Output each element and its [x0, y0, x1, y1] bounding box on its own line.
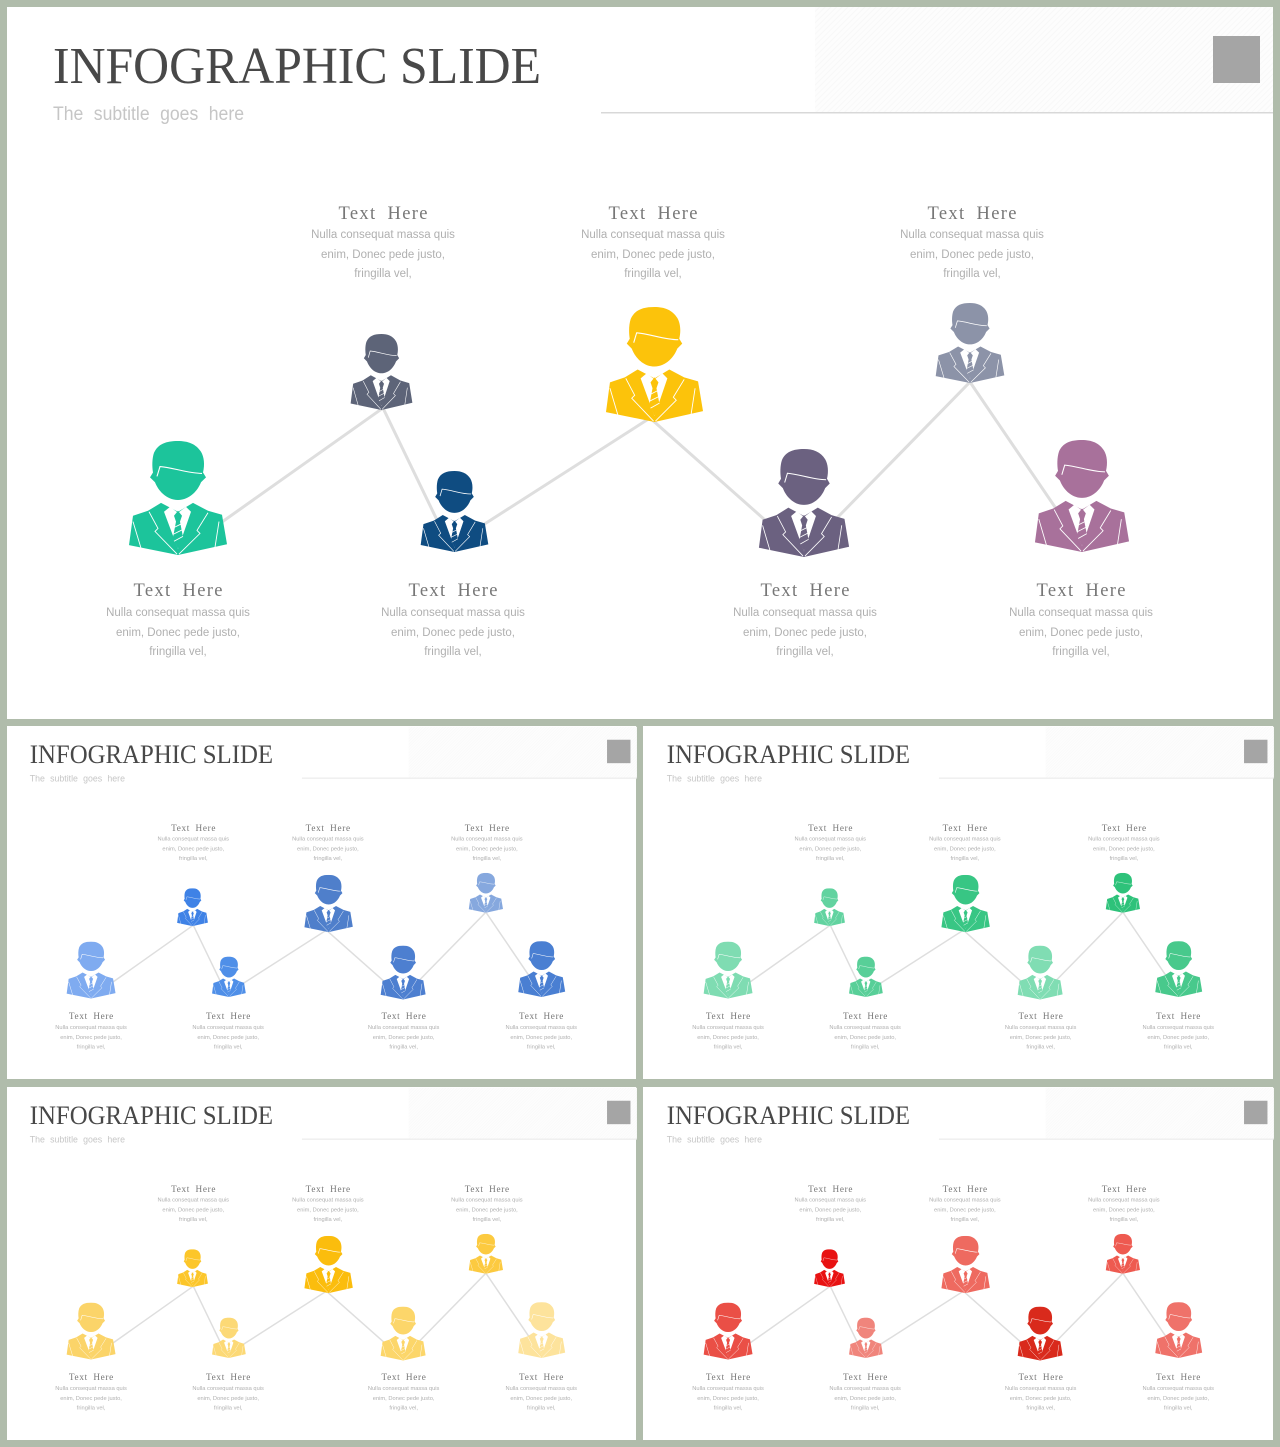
callout 3: [381, 581, 525, 658]
callouts: Text Here: [706, 1011, 750, 1021]
callout 3: Nulla consequat massa quis: [381, 607, 525, 619]
callouts: fringilla vel,: [1164, 1405, 1193, 1411]
callout 1: [106, 581, 250, 658]
callouts: Nulla consequat massa quis: [292, 1197, 364, 1203]
callouts: Nulla consequat massa quis: [795, 836, 866, 842]
callouts: enim, Donec pede justo,: [799, 1207, 862, 1213]
title: INFOGRAPHIC SLIDE: [667, 1101, 910, 1130]
callouts: fringilla vel,: [77, 1405, 106, 1411]
callout 1: Nulla consequat massa quis: [106, 607, 250, 619]
callouts: Text Here: [843, 1011, 887, 1021]
callouts: enim, Donec pede justo,: [162, 846, 225, 852]
callouts: [55, 823, 577, 1050]
callouts: fringilla vel,: [389, 1405, 418, 1411]
person: green: [129, 441, 227, 555]
callout 7: Text Here: [1036, 581, 1126, 601]
callouts: Text Here: [306, 1184, 350, 1194]
callouts: Nulla consequat massa quis: [55, 1025, 127, 1031]
callouts: Text Here: [306, 823, 350, 833]
callout 4: enim, Donec pede justo,: [591, 249, 715, 261]
callouts: fringilla vel,: [1026, 1405, 1055, 1411]
callouts: fringilla vel,: [816, 1217, 845, 1223]
callouts: enim, Donec pede justo,: [510, 1035, 572, 1041]
callouts: enim, Donec pede justo,: [297, 846, 359, 852]
callout 3: Text Here: [408, 581, 498, 601]
subtitle: The subtitle goes here: [667, 774, 762, 785]
connector lines: [750, 1273, 1166, 1345]
callout 5: enim, Donec pede justo,: [743, 627, 867, 639]
callouts: Nulla consequat massa quis: [55, 1386, 127, 1392]
callout 7: [1009, 581, 1153, 658]
callouts: Nulla consequat massa quis: [158, 1197, 229, 1203]
callout 4: fringilla vel,: [624, 268, 682, 280]
callouts: enim, Donec pede justo,: [456, 1207, 518, 1213]
callout 3: enim, Donec pede justo,: [391, 627, 515, 639]
callout 4: [581, 204, 725, 280]
callouts: enim, Donec pede justo,: [934, 1207, 996, 1213]
panel: green variant: [643, 726, 1274, 1079]
callouts: [692, 1184, 1214, 1411]
callouts: enim, Donec pede justo,: [297, 1207, 359, 1213]
callouts: fringilla vel,: [951, 1217, 980, 1223]
callout 6: [900, 204, 1044, 280]
panel: yellow variant: [7, 1087, 637, 1440]
callouts: enim, Donec pede justo,: [373, 1035, 435, 1041]
callout 6: Text Here: [928, 204, 1016, 224]
callouts: Nulla consequat massa quis: [692, 1025, 764, 1031]
subtitle: The subtitle goes here: [30, 1135, 125, 1146]
callouts: enim, Donec pede justo,: [197, 1035, 259, 1041]
callouts: Text Here: [465, 823, 509, 833]
callouts: fringilla vel,: [214, 1405, 243, 1411]
person: mauve: [1035, 440, 1129, 552]
callouts: Text Here: [843, 1372, 887, 1382]
callouts: fringilla vel,: [473, 1217, 502, 1223]
callouts: fringilla vel,: [1026, 1044, 1055, 1050]
corner square: [1213, 36, 1260, 83]
header rule: [601, 112, 1273, 114]
callouts: Text Here: [519, 1011, 563, 1021]
subtitle: The subtitle goes here: [30, 774, 125, 785]
callouts: enim, Donec pede justo,: [834, 1035, 896, 1041]
callouts: enim, Donec pede justo,: [60, 1396, 122, 1402]
connector lines: [113, 1273, 529, 1345]
callout 5: Nulla consequat massa quis: [733, 607, 877, 619]
callout 4: Text Here: [608, 204, 698, 224]
callouts: enim, Donec pede justo,: [1093, 846, 1155, 852]
panel: main slide: [7, 7, 1273, 719]
callout 7: fringilla vel,: [1052, 646, 1110, 658]
callouts: Nulla consequat massa quis: [929, 1197, 1001, 1203]
callouts: Text Here: [69, 1011, 113, 1021]
callouts: Text Here: [1102, 823, 1146, 833]
callouts: Text Here: [1018, 1011, 1063, 1021]
callouts: Nulla consequat massa quis: [192, 1386, 264, 1392]
callouts: Text Here: [171, 1184, 215, 1194]
callouts: enim, Donec pede justo,: [197, 1396, 259, 1402]
callouts: Nulla consequat massa quis: [929, 836, 1001, 842]
connector lines: [113, 912, 529, 984]
callouts: enim, Donec pede justo,: [1093, 1207, 1155, 1213]
callouts: fringilla vel,: [816, 856, 845, 862]
subtitle: The subtitle goes here: [667, 1135, 762, 1146]
callout 1: Text Here: [134, 581, 222, 601]
callouts: Text Here: [206, 1011, 250, 1021]
callouts: enim, Donec pede justo,: [697, 1035, 759, 1041]
callouts: fringilla vel,: [1110, 1217, 1139, 1223]
callout 6: fringilla vel,: [943, 268, 1001, 280]
callouts: enim, Donec pede justo,: [1010, 1396, 1072, 1402]
callouts: fringilla vel,: [77, 1044, 106, 1050]
title: INFOGRAPHIC SLIDE: [667, 740, 910, 769]
callouts: Nulla consequat massa quis: [1005, 1025, 1077, 1031]
callouts: enim, Donec pede justo,: [162, 1207, 225, 1213]
callout 1: enim, Donec pede justo,: [116, 627, 240, 639]
callouts: fringilla vel,: [314, 856, 343, 862]
callout 2: Text Here: [338, 204, 428, 224]
callouts: fringilla vel,: [473, 856, 502, 862]
callouts: enim, Donec pede justo,: [934, 846, 996, 852]
callouts: Text Here: [808, 1184, 852, 1194]
callouts: [55, 1184, 577, 1411]
title: INFOGRAPHIC SLIDE: [30, 1101, 273, 1130]
callout 6: enim, Donec pede justo,: [910, 249, 1034, 261]
callouts: Nulla consequat massa quis: [795, 1197, 866, 1203]
callouts: Text Here: [1018, 1372, 1063, 1382]
callouts: enim, Donec pede justo,: [1010, 1035, 1072, 1041]
header pattern: [815, 7, 1273, 112]
callouts: Nulla consequat massa quis: [505, 1025, 577, 1031]
callouts: fringilla vel,: [527, 1044, 556, 1050]
people: [67, 873, 565, 999]
callout 2: [311, 204, 455, 280]
callouts: Nulla consequat massa quis: [368, 1025, 440, 1031]
callouts: Nulla consequat massa quis: [1088, 1197, 1160, 1203]
callouts: fringilla vel,: [951, 856, 980, 862]
callout 2: enim, Donec pede justo,: [321, 249, 445, 261]
callouts: Text Here: [706, 1372, 750, 1382]
callouts: Text Here: [1156, 1372, 1200, 1382]
callouts: Text Here: [1156, 1011, 1200, 1021]
callouts: fringilla vel,: [179, 1217, 208, 1223]
title: INFOGRAPHIC SLIDE: [53, 38, 541, 95]
callouts: enim, Donec pede justo,: [834, 1396, 896, 1402]
callouts: fringilla vel,: [314, 1217, 343, 1223]
callouts: Nulla consequat massa quis: [829, 1386, 901, 1392]
callout 7: Nulla consequat massa quis: [1009, 607, 1153, 619]
callouts: Text Here: [943, 823, 987, 833]
callout 3: fringilla vel,: [424, 646, 482, 658]
callouts: Nulla consequat massa quis: [292, 836, 364, 842]
callouts: Nulla consequat massa quis: [1088, 836, 1160, 842]
connector lines: [222, 382, 1057, 525]
callouts: Nulla consequat massa quis: [1142, 1386, 1214, 1392]
callouts: Nulla consequat massa quis: [451, 836, 523, 842]
callouts: fringilla vel,: [527, 1405, 556, 1411]
callouts: fringilla vel,: [1164, 1044, 1193, 1050]
callout 1: fringilla vel,: [149, 646, 207, 658]
callouts: fringilla vel,: [851, 1044, 880, 1050]
callouts: Text Here: [808, 823, 852, 833]
callouts: Nulla consequat massa quis: [505, 1386, 577, 1392]
person: grey blue: [936, 303, 1004, 383]
callouts: enim, Donec pede justo,: [1147, 1396, 1209, 1402]
callout 5: fringilla vel,: [776, 646, 834, 658]
title: INFOGRAPHIC SLIDE: [30, 740, 273, 769]
callouts: enim, Donec pede justo,: [456, 846, 518, 852]
callouts: fringilla vel,: [851, 1405, 880, 1411]
callouts: Nulla consequat massa quis: [1005, 1386, 1077, 1392]
callouts: fringilla vel,: [1110, 856, 1139, 862]
callouts: enim, Donec pede justo,: [1147, 1035, 1209, 1041]
callouts: Text Here: [206, 1372, 250, 1382]
callouts: Nulla consequat massa quis: [829, 1025, 901, 1031]
callouts: enim, Donec pede justo,: [510, 1396, 572, 1402]
panel: red variant: [643, 1087, 1274, 1440]
callouts: enim, Donec pede justo,: [60, 1035, 122, 1041]
people: [704, 873, 1202, 999]
callouts: fringilla vel,: [714, 1044, 743, 1050]
connector lines: [750, 912, 1166, 984]
callouts: Text Here: [381, 1372, 426, 1382]
callouts: fringilla vel,: [214, 1044, 243, 1050]
callouts: Text Here: [1102, 1184, 1146, 1194]
callout 6: Nulla consequat massa quis: [900, 229, 1044, 241]
callout 4: Nulla consequat massa quis: [581, 229, 725, 241]
person: dark grey: [351, 334, 412, 410]
callouts: enim, Donec pede justo,: [373, 1396, 435, 1402]
callouts: fringilla vel,: [714, 1405, 743, 1411]
callout 7: enim, Donec pede justo,: [1019, 627, 1143, 639]
callouts: Text Here: [171, 823, 215, 833]
callout 2: Nulla consequat massa quis: [311, 229, 455, 241]
callout 5: Text Here: [760, 581, 850, 601]
callouts: Text Here: [943, 1184, 987, 1194]
callout 2: fringilla vel,: [354, 268, 412, 280]
callouts: Nulla consequat massa quis: [692, 1386, 764, 1392]
callouts: [692, 823, 1214, 1050]
callouts: Nulla consequat massa quis: [368, 1386, 440, 1392]
callouts: Nulla consequat massa quis: [192, 1025, 264, 1031]
person: navy: [421, 471, 488, 552]
subtitle: The subtitle goes here: [53, 104, 244, 125]
callouts: enim, Donec pede justo,: [799, 846, 862, 852]
callouts: Nulla consequat massa quis: [158, 836, 229, 842]
callouts: Text Here: [519, 1372, 563, 1382]
callouts: fringilla vel,: [389, 1044, 418, 1050]
person: purple: [759, 449, 849, 557]
callouts: fringilla vel,: [179, 856, 208, 862]
panel: blue variant: [7, 726, 637, 1079]
callouts: Nulla consequat massa quis: [451, 1197, 523, 1203]
callout 5: [733, 581, 877, 658]
people: [704, 1234, 1202, 1360]
person: yellow: [606, 307, 703, 422]
callouts: Nulla consequat massa quis: [1142, 1025, 1214, 1031]
callouts: enim, Donec pede justo,: [697, 1396, 759, 1402]
people: [67, 1234, 565, 1360]
callouts: Text Here: [69, 1372, 113, 1382]
callouts: Text Here: [381, 1011, 426, 1021]
callouts: Text Here: [465, 1184, 509, 1194]
